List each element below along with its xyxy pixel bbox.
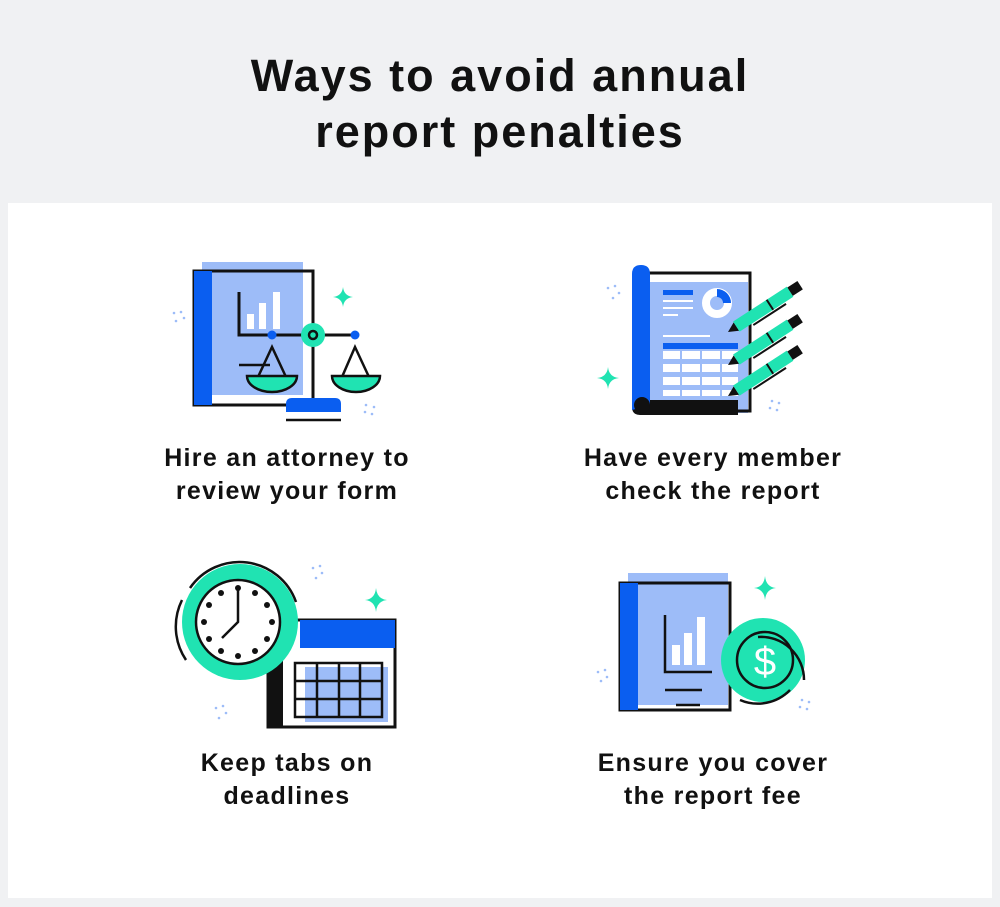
label: hire attorney (164, 444, 410, 505)
label: have every member: check the report (605, 477, 821, 505)
icon: report with pens (597, 265, 804, 415)
icon: clock and calendar (176, 562, 395, 727)
icon: document with coin: $ (754, 640, 776, 684)
label: hire attorney: review your form (176, 477, 398, 505)
title: report penalties (315, 106, 685, 157)
label: ensure fee (598, 749, 828, 810)
panel: main white card (8, 203, 992, 898)
label: keep tabs (201, 749, 373, 810)
icon: document with scales (173, 262, 380, 420)
label: have every member: Have every member (584, 444, 842, 472)
icon: document with coin (597, 573, 810, 710)
title: Ways to avoid annual (251, 50, 749, 101)
label: ensure fee: Ensure you cover (598, 749, 828, 777)
label: keep tabs: deadlines (223, 782, 351, 810)
label: have every member (584, 444, 842, 505)
label: hire attorney: Hire an attorney to (164, 444, 410, 472)
label: keep tabs: Keep tabs on (201, 749, 373, 777)
title (251, 50, 749, 157)
label: ensure fee: the report fee (624, 782, 802, 810)
